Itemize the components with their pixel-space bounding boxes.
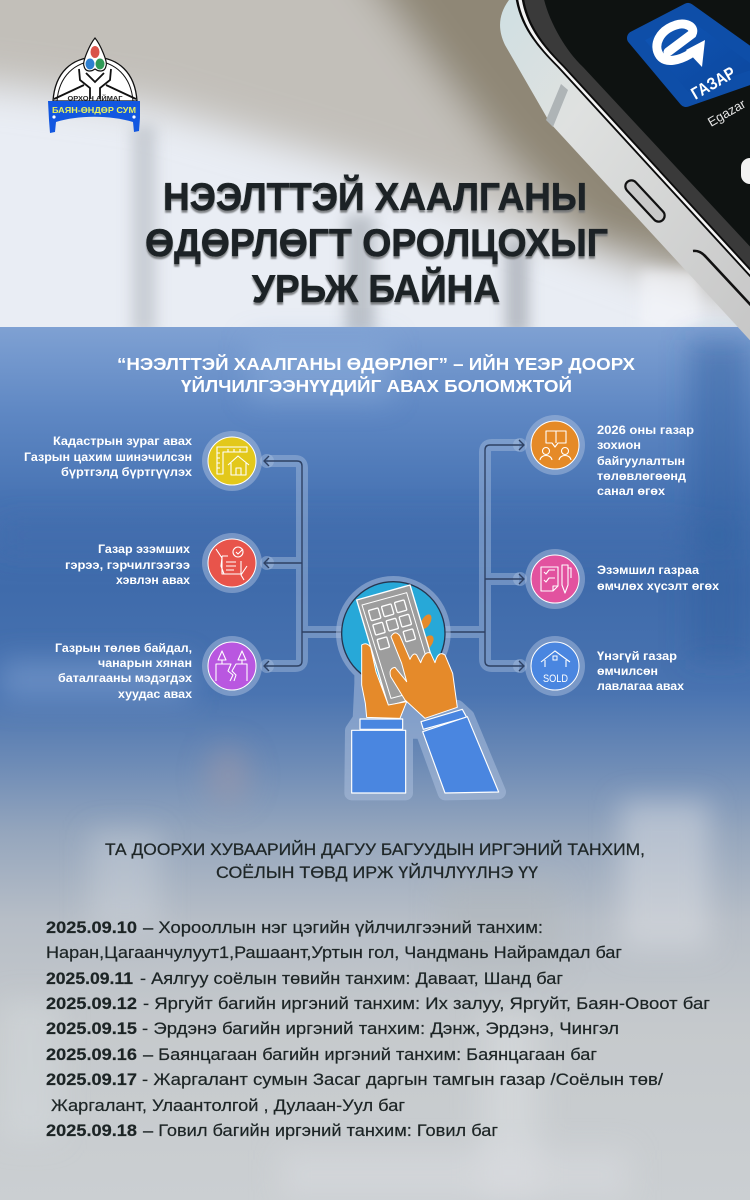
service: land condition report	[55, 636, 262, 701]
label	[65, 542, 190, 587]
2025.09.17: Жаргалант, Улаантолгой , Дулаан-Уул баг	[51, 1097, 405, 1115]
label	[597, 563, 719, 593]
sleeves	[352, 709, 499, 793]
label: Эзэмшил газраа	[597, 563, 699, 577]
label: санал өгөх	[597, 484, 665, 498]
subheading: ҮЙЛЧИЛГЭЭНҮҮДИЙГ АВАХ БОЛОМЖТОЙ	[181, 375, 572, 396]
logo: Orkhon aimag Bayan-Ondor sum	[48, 38, 140, 133]
title: НЭЭЛТТЭЙ ХААЛГАНЫ	[163, 174, 587, 219]
2025.09.17	[46, 1071, 663, 1115]
label: байгуулалтын	[597, 454, 685, 468]
2025.09.10: 2025.09.10	[46, 919, 137, 937]
2025.09.15: 2025.09.15	[46, 1020, 137, 1038]
app caption: Egazar	[705, 96, 749, 130]
2025.09.17: 2025.09.17	[46, 1071, 137, 1089]
left hand	[362, 644, 407, 718]
label	[597, 423, 694, 498]
service: unique land reference	[525, 636, 684, 696]
service: ownership application	[525, 549, 719, 609]
icon: checklist and pen	[541, 565, 571, 593]
label: гэрээ, гэрчилгээгээ	[65, 558, 190, 572]
schedule heading: СОЁЛЫН ТӨВД ИРЖ ҮЙЛЧЛҮҮЛНЭ ҮҮ	[216, 863, 539, 882]
label: 2026 оны газар	[597, 423, 694, 437]
fingers behind phone	[417, 613, 436, 654]
icon: hands with document	[216, 547, 247, 580]
label: Газрын цахим шинэчилсэн	[24, 450, 192, 464]
service: land planning feedback	[525, 415, 694, 498]
label: өмчилсөн	[597, 664, 658, 678]
label	[597, 649, 684, 693]
2025.09.18: – Говил багийн иргэний танхим: Говил баг	[143, 1122, 498, 1140]
2025.09.11: - Аялгуу соёлын төвийн танхим: Давaат, Шанд баг	[140, 970, 563, 988]
arrows from center to services	[264, 440, 524, 671]
2025.09.16: 2025.09.16	[46, 1046, 137, 1064]
label: хэвлэн авах	[116, 573, 190, 587]
label: зохион	[597, 438, 641, 452]
2025.09.11: 2025.09.11	[46, 970, 133, 988]
icon: people and book	[540, 431, 571, 460]
phone	[357, 585, 442, 706]
arrow bumps	[260, 438, 527, 673]
label: Газрын төлөв байдал,	[55, 641, 192, 655]
logo text: sum: БАЯН-ӨНДӨР СУМ	[52, 106, 136, 115]
label	[55, 641, 192, 701]
label: Газар эзэмших	[98, 542, 190, 556]
2025.09.12: 2025.09.12	[46, 995, 137, 1013]
2025.09.16: – Баянцагаан багийн иргэний танхим: Баянцагаан баг	[143, 1046, 597, 1064]
title: УРЬЖ БАЙНА	[252, 266, 500, 311]
icon: cracked land	[216, 651, 247, 681]
label: чанарын хянан	[98, 656, 192, 670]
2025.09.17: - Жаргалант сумын Засаг даргын тамгын газар /Соёлын төв/	[142, 1071, 663, 1089]
title: ӨДӨРЛӨГТ ОРОЛЦОХЫГ	[145, 222, 608, 265]
icon: sold house: SOLD	[543, 673, 568, 685]
app icon: e mark	[657, 24, 705, 67]
blue disc	[342, 582, 445, 685]
icon: sold house	[541, 651, 570, 685]
schedule heading	[105, 840, 645, 882]
label: төлөвлөгөөнд	[597, 469, 686, 483]
label: хуудас авах	[118, 687, 192, 701]
title	[145, 174, 608, 311]
label: Үнэгүй газар	[597, 649, 677, 663]
label: лавлагаа авах	[597, 679, 684, 693]
app icon	[634, 10, 750, 100]
2025.09.18: 2025.09.18	[46, 1122, 137, 1140]
label	[24, 434, 192, 479]
right hand	[390, 633, 457, 718]
2025.09.10: Наран,Цагаанчулуут1,Рашаант,Уртын гол, Чандмань Найрамдал баг	[46, 944, 622, 962]
service: cadastral map	[24, 431, 262, 491]
service: lease contract	[65, 533, 262, 593]
label: Кадастрын зураг авах	[53, 434, 192, 448]
central illustration: hands tapping a phone	[336, 576, 499, 793]
2025.09.15: - Эрдэнэ багийн иргэний танхим: Дэнж, Эрдэнэ, Чингэл	[142, 1020, 619, 1038]
app label: ГАЗАР	[688, 63, 739, 103]
illustration halo	[336, 576, 499, 793]
connector halos	[268, 445, 519, 666]
label: баталгааны мэдэгдэх	[58, 671, 192, 685]
label: өмчлөх хүсэлт өгөх	[597, 579, 719, 593]
logo text: aimag: ОРХОН АЙМАГ	[68, 94, 123, 102]
subheading	[117, 353, 635, 396]
2025.09.12: - Яргуйт багийн иргэний танхим: Их залуу, Яргуйт, Баян-Овоот баг	[143, 995, 710, 1013]
2025.09.10: – Хорооллын нэг цэгийн үйлчилгээний танхим:	[143, 919, 543, 937]
label: бүртгэлд бүртгүүлэх	[61, 465, 192, 479]
schedule heading: ТА ДООРХИ ХУВААРИЙН ДАГУУ БАГУУДЫН ИРГЭНИЙ ТАНХИМ,	[105, 840, 645, 859]
2025.09.10	[46, 919, 622, 962]
phone mockup with Egazar app	[500, 0, 750, 362]
icon: ruler and house	[217, 447, 249, 475]
subheading: “НЭЭЛТТЭЙ ХААЛГАНЫ ӨДӨРЛӨГ” – ИЙН ҮЕЭР ДООРХ	[117, 353, 635, 374]
schedule list	[46, 919, 710, 1140]
